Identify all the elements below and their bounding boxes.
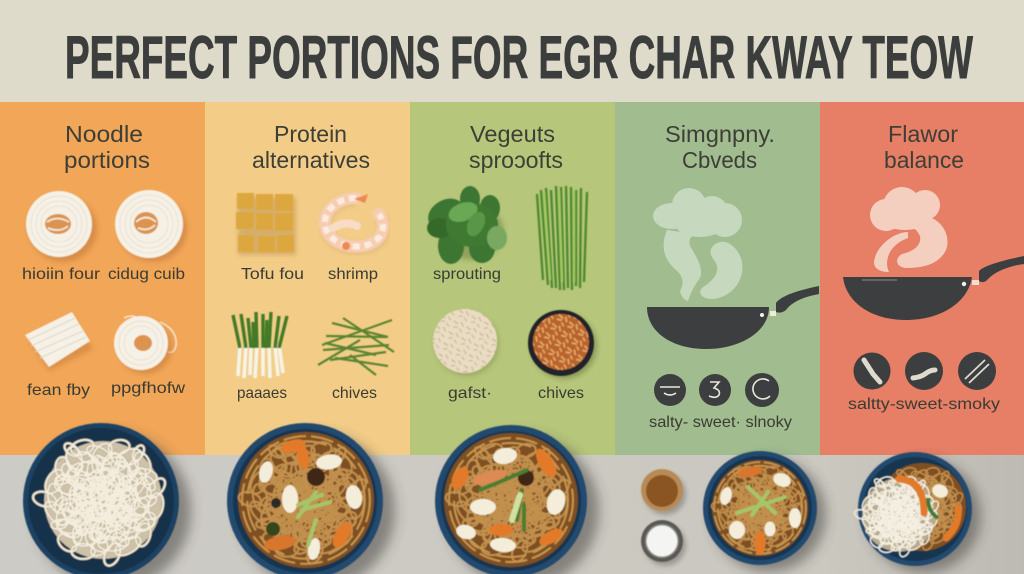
- heading: vegeuts sprojofts: [469, 121, 563, 173]
- label: cidug cuib: cidug cuib: [108, 266, 185, 283]
- heading: protein alternatives: [252, 121, 370, 173]
- label: saltty sweet smoky: saltty-sweet-smoky: [848, 396, 1000, 413]
- icon: steam: [653, 188, 742, 301]
- label: ppgfhofw: ppgfhofw: [111, 380, 186, 397]
- icon: bowl of fried shallots: [528, 310, 597, 379]
- label: paaaes: paaaes: [237, 385, 287, 402]
- icon: wok: [843, 256, 1024, 320]
- heading: vegeuts sprojofts: Vegeuts: [470, 121, 555, 147]
- icon: noodle nest 2: [115, 190, 187, 262]
- panel: protein alternatives: [205, 102, 410, 455]
- heading: protein alternatives: alternatives: [252, 147, 370, 173]
- icon: long chives bunch: [537, 186, 587, 290]
- bowl: plain noodles: [23, 423, 191, 574]
- heading: noodle portions: Noodle: [65, 121, 143, 147]
- icon: spring onions: [233, 312, 287, 378]
- panel: vegetables and sprouts: [410, 102, 615, 455]
- icon: tofu cubes: [236, 193, 296, 255]
- dish: salt: [641, 520, 686, 566]
- toppings: [899, 479, 958, 538]
- toppings: [257, 437, 364, 561]
- icon: noodle nest 1: [26, 191, 97, 262]
- heading: flavor balance: balance: [884, 147, 964, 173]
- label: salty sweet smoky: salty- sweet· slnoky: [649, 414, 792, 431]
- icon: rice mound: [433, 309, 499, 376]
- label: chives: chives: [538, 385, 584, 402]
- toppings: [448, 446, 568, 553]
- icon: wok: [647, 286, 819, 349]
- heading: flavor balance: Flawor: [888, 121, 958, 147]
- icon: flavor circles: [854, 352, 996, 390]
- label: shrimp: shrimp: [328, 266, 378, 283]
- heading: noodle portions: [64, 121, 150, 173]
- bowl: half noodles half stir-fry: [848, 452, 981, 573]
- bowl: stir-fry 2: [435, 425, 599, 574]
- title banner: [0, 0, 1024, 102]
- bowl: stir-fry small: [703, 451, 826, 572]
- panel: simgnpny chveds: [615, 102, 820, 455]
- label: chives: chives: [332, 385, 377, 402]
- icon: shrimp: [325, 194, 384, 250]
- panel: noodle portions: [0, 102, 205, 455]
- bowl: stir-fry 1: [227, 423, 395, 574]
- label: tofu fou: Tofu fou: [241, 266, 304, 283]
- dish: brown sauce: [641, 469, 686, 515]
- label: fean fby: fean fby: [27, 382, 90, 399]
- icon: steam: [870, 187, 948, 272]
- toppings: [718, 464, 801, 555]
- heading: flavor balance: [884, 121, 964, 173]
- table surface: [0, 455, 1024, 574]
- heading: protein alternatives: Protein: [274, 121, 347, 147]
- heading: vegeuts sprojofts: sproɔofts: [469, 147, 563, 173]
- heading: noodle portions: portions: [64, 147, 150, 173]
- heading: simgnpny chveds: Simgnpny.: [665, 121, 775, 147]
- icon: flavor circles: [654, 373, 779, 407]
- label: hioiin four: hioiin four: [22, 266, 101, 283]
- heading: simgnpny chveds: Cbveds: [682, 147, 757, 173]
- icon: leafy greens: [423, 186, 507, 264]
- icon: chives crossed: [318, 318, 394, 375]
- icon: flat noodle bundle: [25, 312, 93, 371]
- panel: flavor balance: [820, 102, 1024, 455]
- icon: small noodle coil: [114, 316, 176, 374]
- label: gafst: gafst·: [448, 385, 492, 402]
- heading: simgnpny chveds: [665, 121, 775, 173]
- label: sprouting: sprouting: [433, 266, 501, 283]
